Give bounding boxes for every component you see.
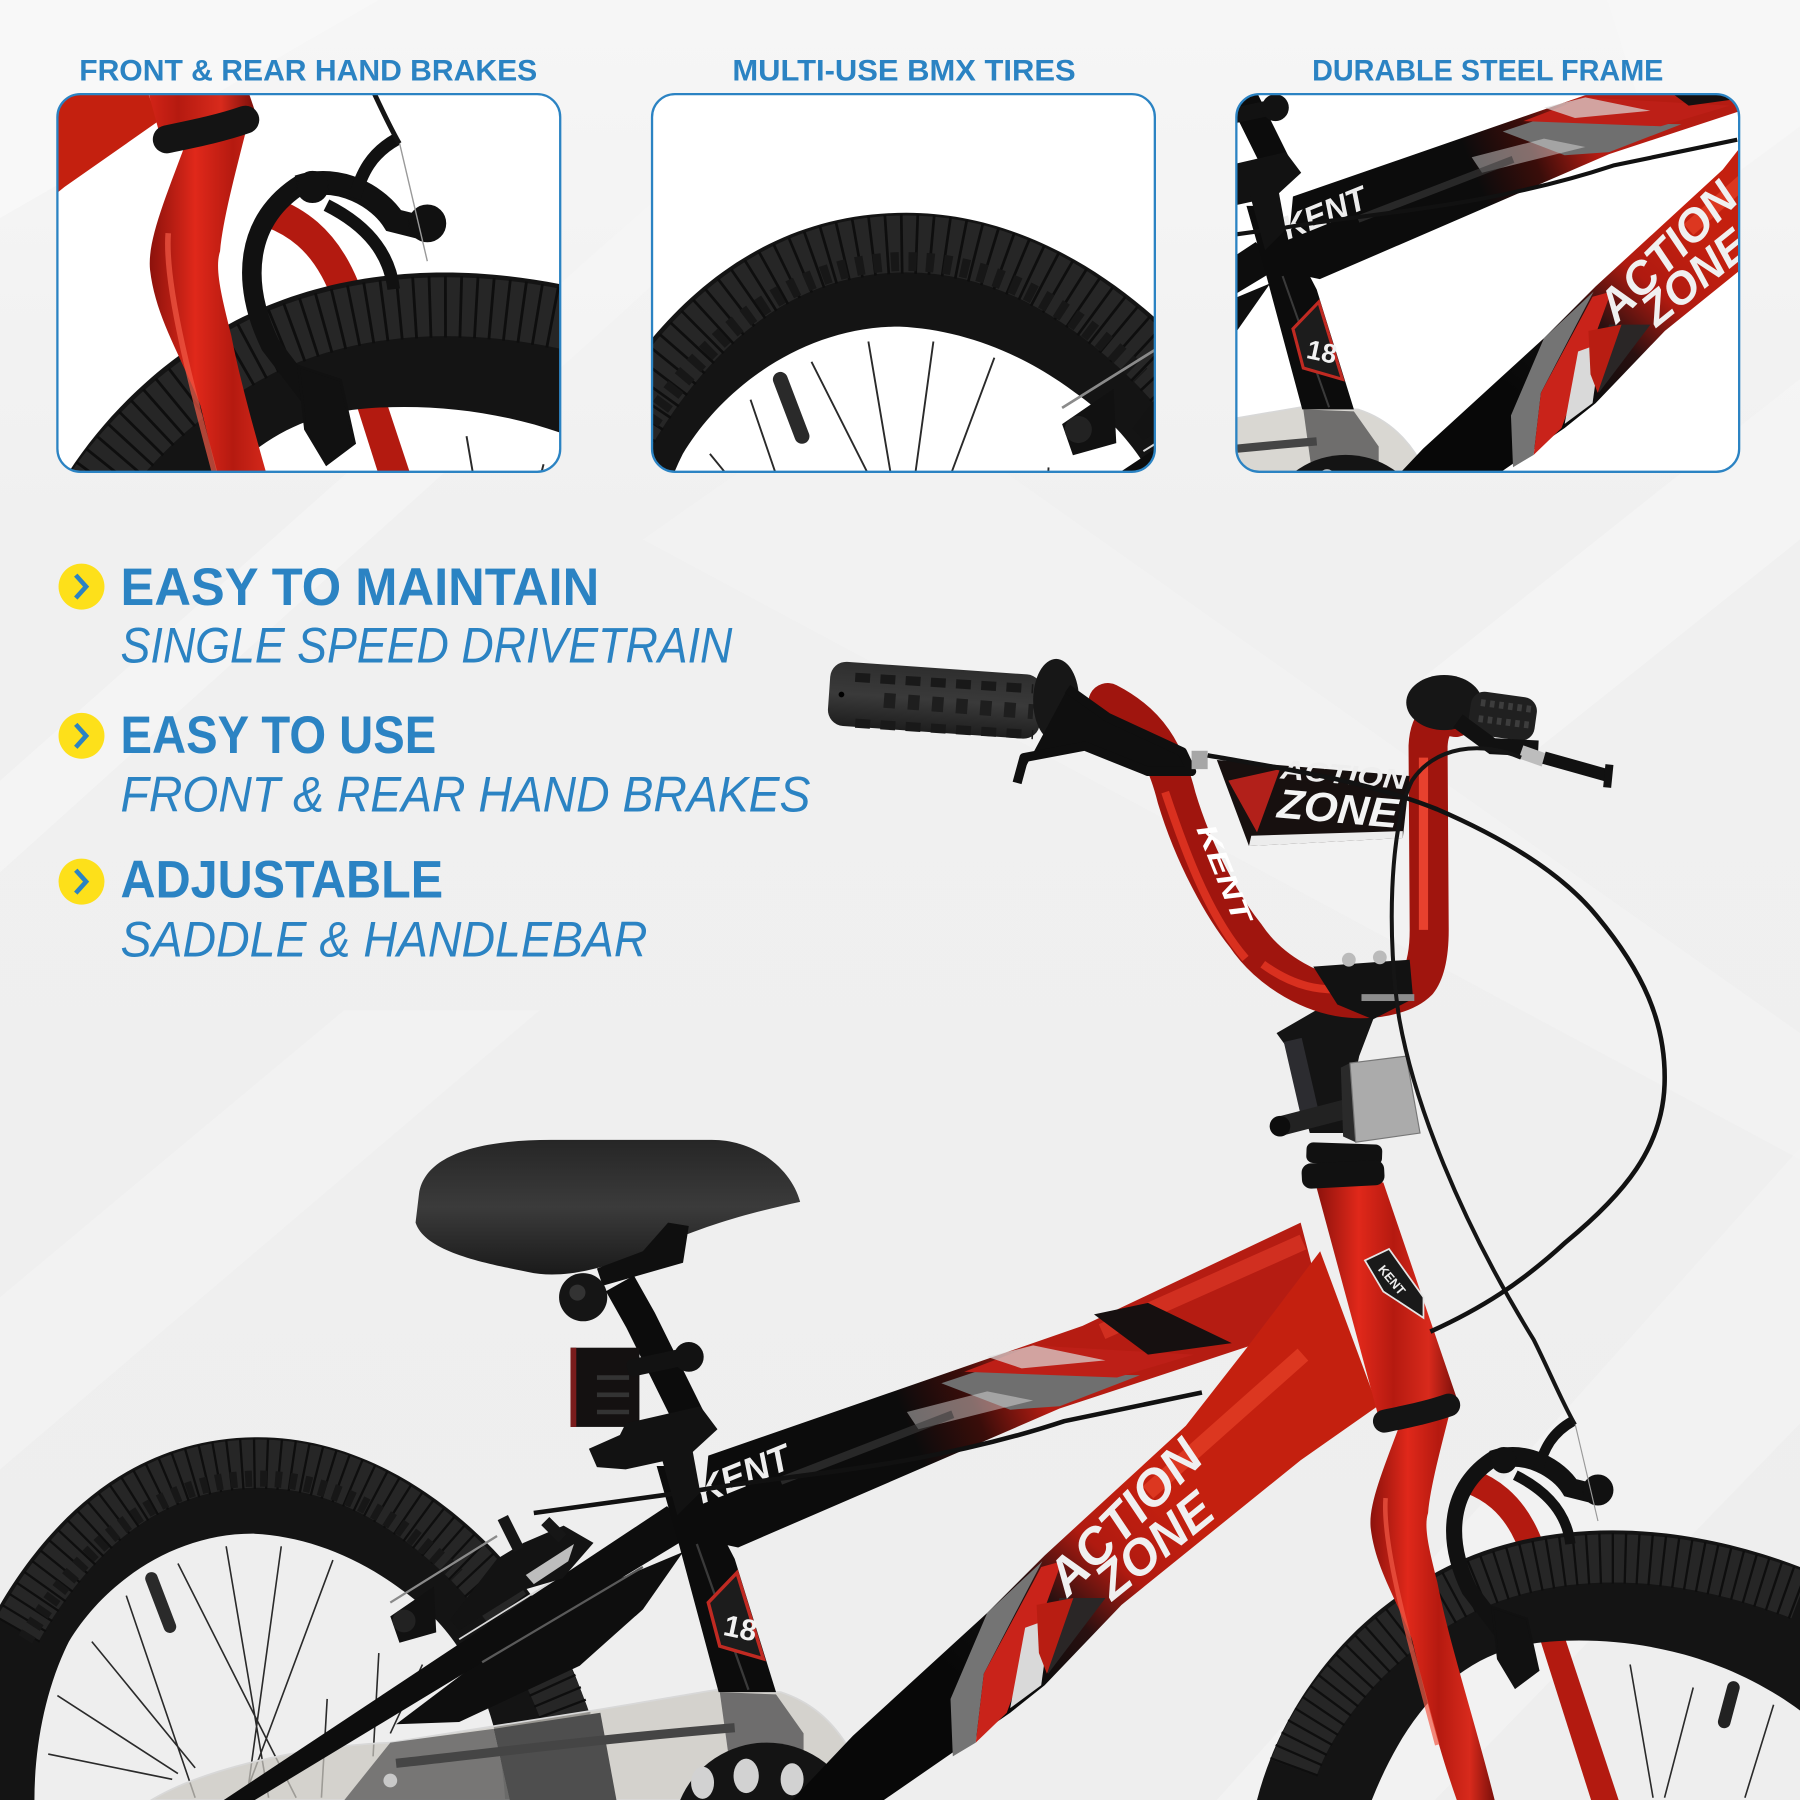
rear wheel spokes: [48, 1546, 422, 1798]
seat tube with 18 badge: [657, 1466, 776, 1692]
rear brake: [390, 1518, 593, 1643]
front brake cable: [1392, 748, 1575, 1425]
feature description: SADDLE & HANDLEBAR: [121, 910, 647, 967]
feature description: FRONT & REAR HAND BRAKES: [121, 766, 811, 823]
stem clamp: [1313, 951, 1414, 1019]
feature: easy to use: [59, 706, 811, 823]
reflector: [1341, 1056, 1420, 1142]
heading: front & rear hand brakes: FRONT & REAR HAND BRAKES: [79, 54, 537, 87]
head tube with Kent badge: KENT: [1375, 1263, 1408, 1298]
top tube: KENT: [690, 1435, 799, 1511]
bike illustration: [0, 659, 1800, 1800]
down tube: ACTION: [1034, 1426, 1214, 1607]
seat post bands and clamp: [589, 1342, 717, 1515]
rear tire: [0, 1437, 608, 1800]
handlebar: [1108, 703, 1456, 999]
seat post: [620, 1283, 695, 1429]
fork rear blade: [1469, 1481, 1619, 1800]
icon: yellow chevron bullet: [59, 713, 104, 759]
rear reflector: [571, 1348, 639, 1427]
Kent label on bar: KENT: [1191, 819, 1259, 930]
heading: durable steel frame: DURABLE STEEL FRAME: [1312, 54, 1663, 87]
handlebar pad: [1217, 753, 1410, 846]
panel: multi-use BMX tires photo: [650, 93, 1156, 473]
feature: adjustable: [59, 851, 647, 967]
head tube with Kent badge: [1317, 1182, 1457, 1413]
down tube: [792, 1251, 1378, 1800]
heading: multi-use BMX tires: MULTI-USE BMX TIRES: [732, 54, 1076, 87]
front valve: [1724, 1688, 1733, 1722]
rear valve: [152, 1578, 170, 1627]
rear stays: [224, 1506, 695, 1800]
front brake: [1454, 1421, 1613, 1688]
icon: yellow chevron bullet: [59, 564, 104, 610]
handlebar stem: [1270, 1008, 1378, 1136]
saddle rails and clamp: [559, 1223, 689, 1321]
top tube: [690, 1223, 1320, 1547]
chain guard: [152, 1690, 863, 1800]
panel: front & rear hand brakes photo: [56, 93, 562, 473]
feature title: EASY TO USE: [121, 706, 436, 765]
handlebar pad: ACTION: [1278, 753, 1409, 795]
feature description: SINGLE SPEED DRIVETRAIN: [121, 616, 733, 673]
front tire: [1257, 1530, 1800, 1800]
rear brake cable along top tube: [534, 1392, 1202, 1513]
feature: easy to maintain: [59, 558, 733, 673]
panel: durable steel frame photo: [1235, 93, 1740, 473]
left grip and brake lever: [827, 659, 1208, 783]
icon: yellow chevron bullet: [59, 859, 104, 905]
headset: [1301, 1142, 1385, 1189]
front wheel spokes: [1630, 1665, 1774, 1798]
right grip and brake lever: [1406, 675, 1609, 788]
handlebar cable loop: [1208, 755, 1665, 1332]
feature title: ADJUSTABLE: [121, 851, 443, 910]
handlebar pad: ZONE: [1275, 780, 1401, 837]
fork left blade: [1370, 1407, 1495, 1800]
fork crown ring: [1384, 1405, 1449, 1421]
feature title: EASY TO MAINTAIN: [121, 558, 599, 617]
saddle: [416, 1140, 800, 1274]
seat tube with 18 badge: 18: [721, 1609, 760, 1648]
down tube: ZONE: [1082, 1480, 1226, 1611]
